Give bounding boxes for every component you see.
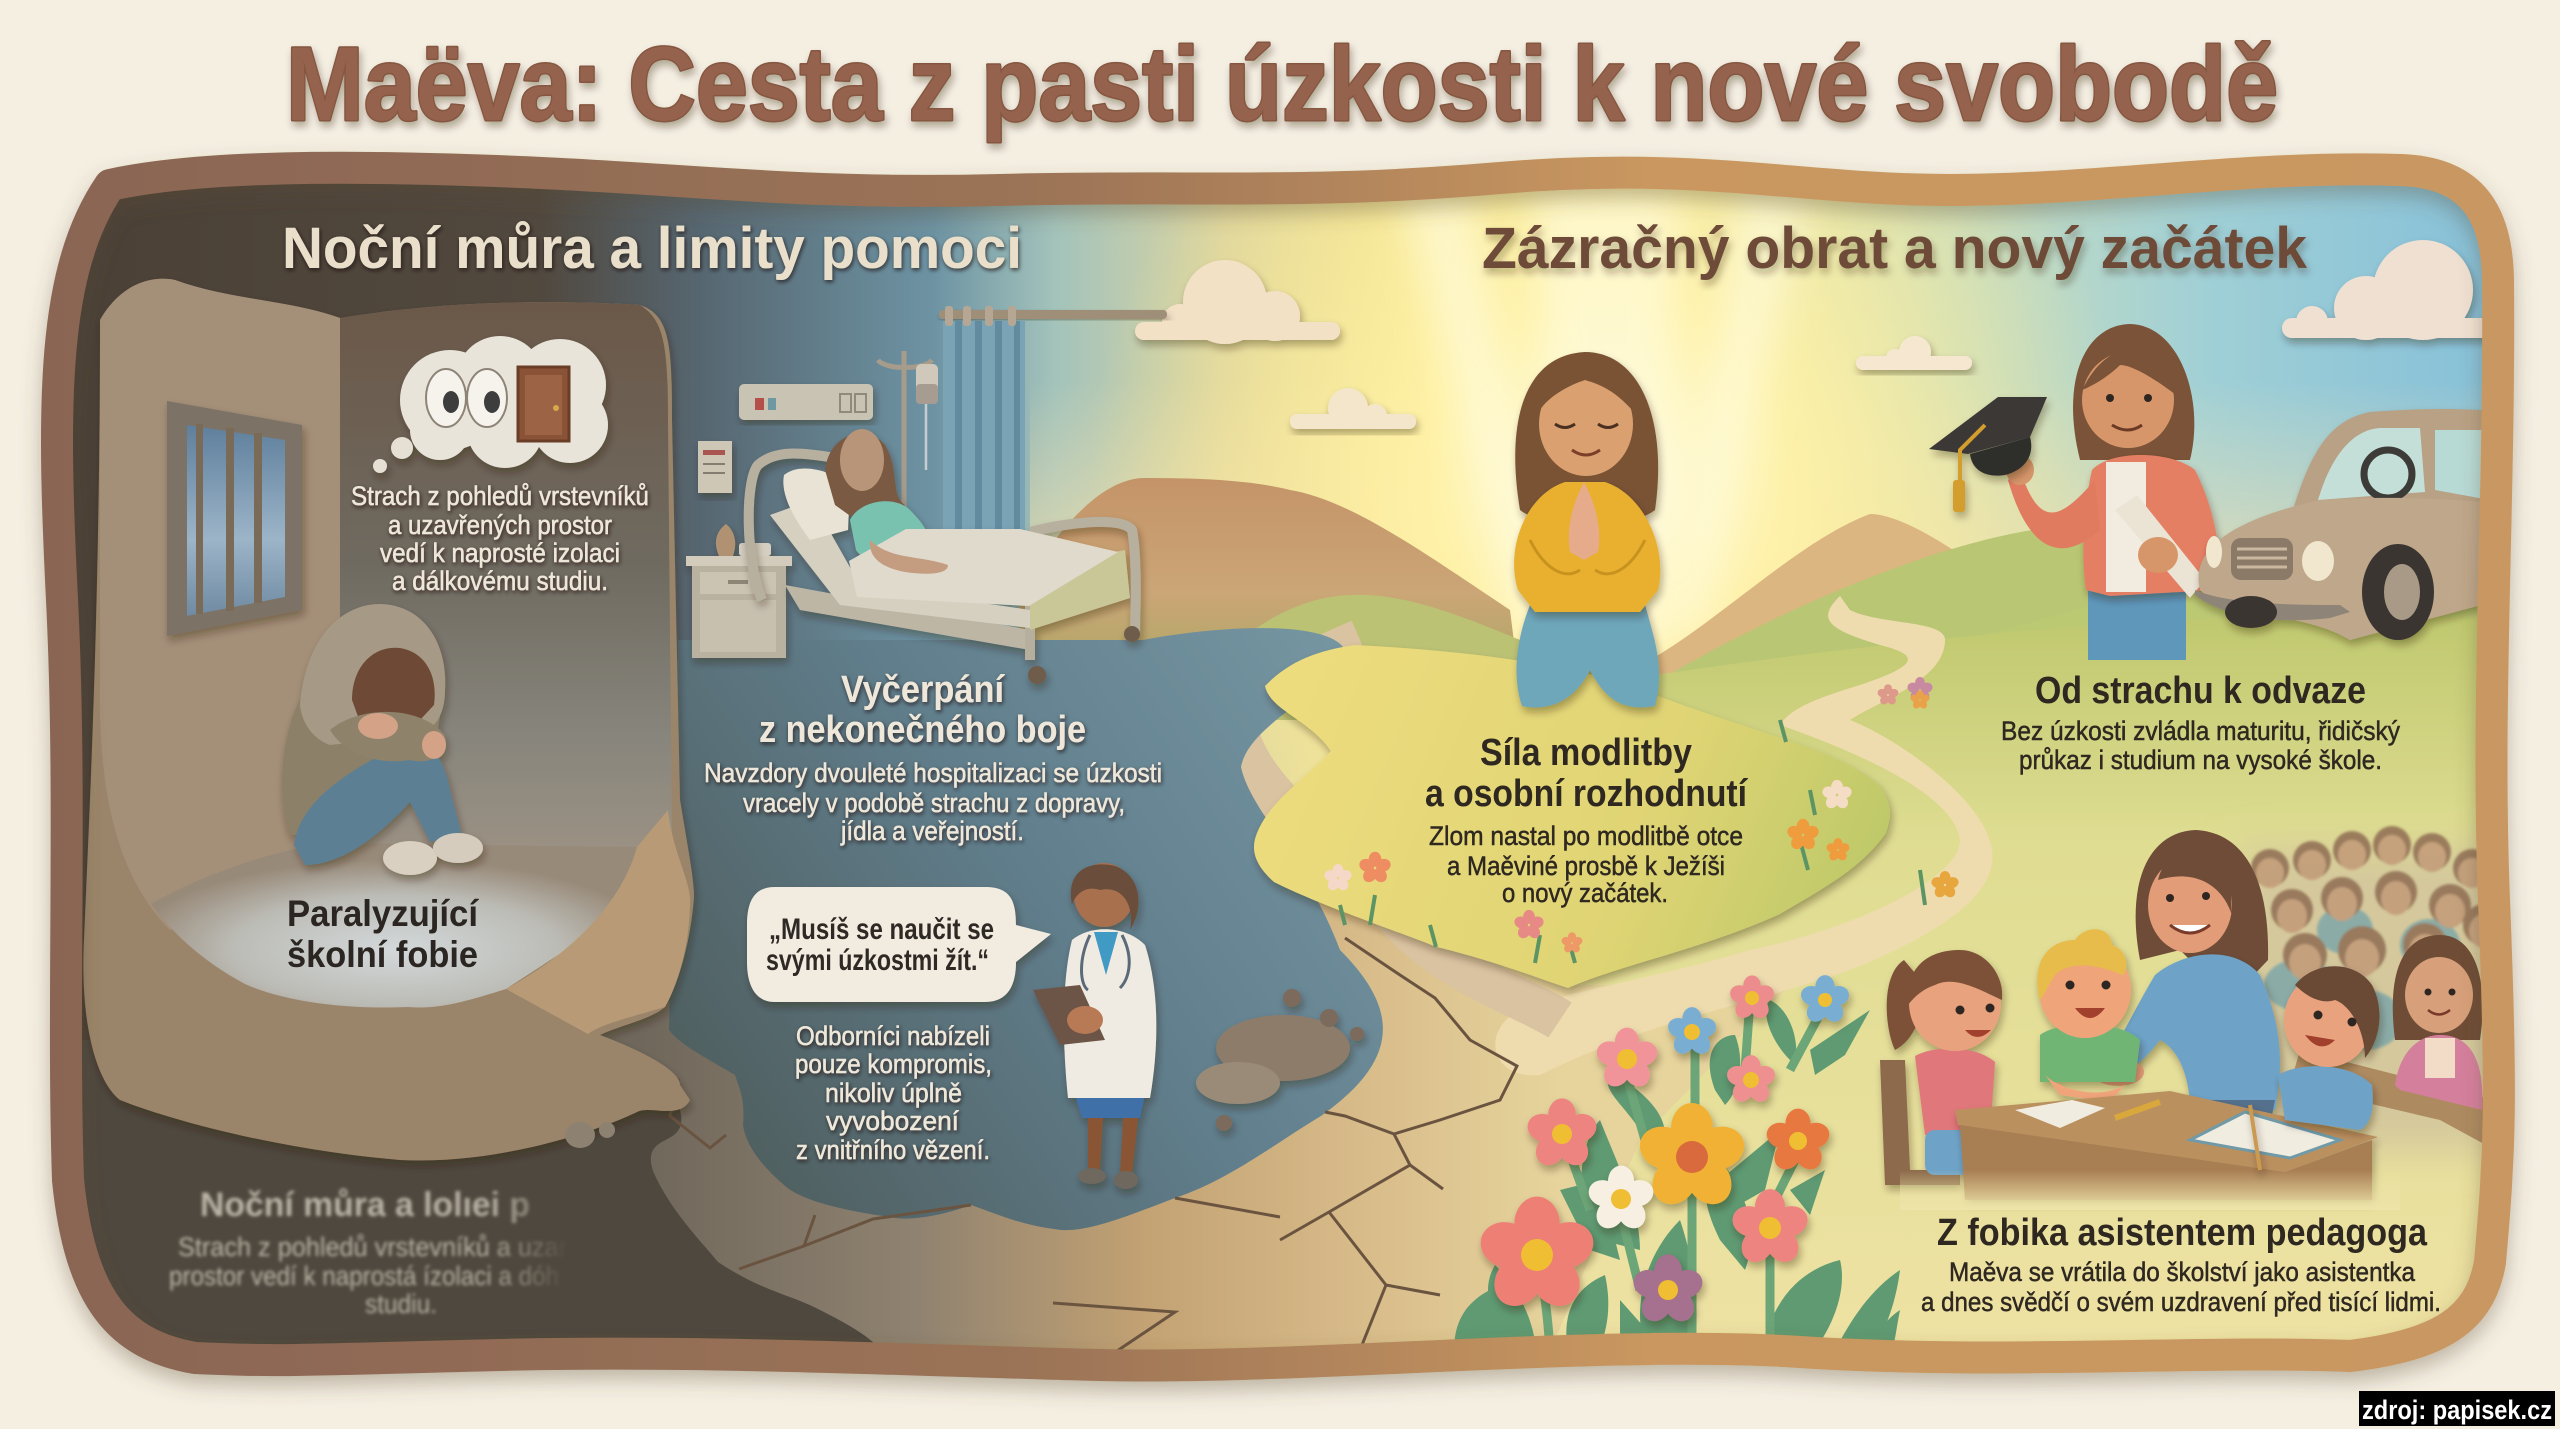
right wall <box>340 302 672 880</box>
heading: Vyčerpání z nekonečného boje <box>759 669 1086 751</box>
pupil: boy writing <box>2250 966 2379 1170</box>
classroom crowd <box>2251 826 2505 1050</box>
flower bunch <box>1412 975 1900 1365</box>
text: assistant <box>1921 1257 2441 1317</box>
speech bubble <box>747 887 1051 1002</box>
face <box>1539 372 1633 476</box>
IV pole and bag <box>878 351 938 510</box>
heading: Síla modlitby: Síla modlitby <box>1480 732 1692 774</box>
hair <box>1515 352 1658 525</box>
floor <box>151 843 640 1008</box>
curtain and rod <box>939 306 1167 541</box>
sky and wall backdrop <box>73 184 2482 1040</box>
hospital bed with patient <box>749 429 1140 684</box>
heading: left section: Noční můra a limity pomoci <box>282 216 1022 281</box>
dark lower-left ground <box>564 1109 874 1342</box>
text: experts: pouze kompromis, <box>795 1049 992 1079</box>
side path <box>1239 640 1560 1020</box>
jeans <box>1517 605 1659 708</box>
text: experts: Odborníci nabízeli <box>796 1021 990 1051</box>
text: hospitalisation <box>704 758 1162 846</box>
panel: illustrated landscape <box>73 184 2483 1350</box>
jeans <box>294 743 462 865</box>
under frame <box>785 585 1030 650</box>
text: thought caption <box>351 481 649 596</box>
teacher <box>2092 830 2280 1125</box>
heart meadow <box>1254 645 1890 988</box>
text: ghost caption <box>169 1186 567 1319</box>
barred window <box>167 401 302 636</box>
text: assistant: a dnes svědčí o svém uzdravení před tisící lidmi. <box>1921 1287 2441 1317</box>
right meadow <box>1558 635 2482 1342</box>
stone room <box>83 279 694 1160</box>
text: bubble quote: svými úzkostmi žít.“ <box>766 944 989 977</box>
cloud centre right <box>1856 336 1972 370</box>
title: Maëva: Cesta z pasti úzkosti k nové svobodě <box>286 26 2278 143</box>
text: Paralyzující školní fobie <box>287 893 480 975</box>
text: courage <box>2001 716 2400 775</box>
cloud right <box>2282 240 2507 340</box>
praying hands <box>1569 482 1599 560</box>
text: hospitalisation: jídla a veřejností. <box>840 816 1024 846</box>
fade under desk <box>1900 1170 2400 1210</box>
pupil: blond boy <box>2037 929 2140 1102</box>
text: bubble quote <box>766 913 994 977</box>
nightstand <box>686 524 792 658</box>
blossoms <box>1475 975 1852 1327</box>
text: Paralyzující školní fobie: školní fobie <box>287 934 478 975</box>
text: hospitalisation: Navzdory dvouleté hospitalizaci se úzkosti <box>704 758 1162 788</box>
heading: right section: Zázračný obrat a nový začátek <box>1482 216 2308 281</box>
text: thought caption: vedí k naprosté izolaci <box>380 538 620 568</box>
rocks <box>1196 989 1364 1131</box>
shoes <box>383 841 437 875</box>
arms <box>330 712 446 761</box>
poster <box>698 441 732 493</box>
text: prayer: Zlom nastal po modlitbě otce <box>1429 821 1743 851</box>
foot board <box>1030 522 1136 635</box>
left wall <box>100 279 340 930</box>
heading: Z fobika asistentem pedagoga: Z fobika asistentem pedagoga <box>1937 1212 2428 1254</box>
hooded figure <box>282 604 483 875</box>
text: courage: Bez úzkosti zvládla maturitu, řidičský <box>2001 716 2400 746</box>
small meadow flowers <box>1323 677 1960 963</box>
hospital gown <box>850 501 929 559</box>
pillow <box>783 468 850 540</box>
green hills <box>1256 530 2478 720</box>
wall monitor <box>739 384 873 420</box>
back desk <box>2290 1050 2495 1150</box>
leaves and stems <box>1412 1000 1900 1365</box>
heading: Síla modlitby <box>1425 732 1748 815</box>
hair <box>352 648 435 722</box>
face <box>840 429 884 491</box>
thought cloud <box>373 336 608 473</box>
text: assistant: Maěva se vrátila do školství jako asistentka <box>1949 1257 2416 1287</box>
jacket <box>282 680 445 835</box>
text: experts <box>795 1021 992 1165</box>
text: experts: vyvobození <box>826 1106 959 1136</box>
text: ghost caption: Strach z pohledů vrstevníků a uzar <box>178 1232 567 1262</box>
text: ghost caption: Noční můra a lolıei p <box>200 1186 530 1224</box>
sun glow <box>1160 188 2074 656</box>
text: Paralyzující školní fobie: Paralyzující <box>287 893 480 934</box>
text: thought caption: Strach z pohledů vrstevníků <box>351 481 649 511</box>
text: prayer: o nový začátek. <box>1502 878 1668 908</box>
doctor <box>1033 863 1156 1189</box>
classroom haze <box>2240 850 2520 1150</box>
classroom desk <box>1955 1091 2378 1200</box>
small pebbles <box>565 1122 615 1148</box>
mountains <box>1020 478 1952 674</box>
text: hospitalisation: vracely v podobě strachu z dopravy, <box>743 788 1125 818</box>
backrest <box>770 500 1030 628</box>
mattress end <box>1030 550 1130 630</box>
girl at back <box>2393 935 2483 1110</box>
sweater <box>1514 482 1660 612</box>
earth cracks <box>588 938 1517 1353</box>
pupil: girl with ponytail <box>1880 950 2002 1185</box>
river <box>669 628 1383 1230</box>
heading: Vyčerpání z nekonečného boje: Vyčerpání <box>841 669 1005 711</box>
heading: Vyčerpání z nekonečného boje: z nekonečného boje <box>759 709 1086 751</box>
text: courage: průkaz i studium na vysoké škole. <box>2019 745 2382 775</box>
text: experts: nikoliv úplně <box>825 1078 962 1108</box>
head rail <box>749 454 835 600</box>
cloud small <box>1290 388 1416 429</box>
text: prayer <box>1429 821 1743 908</box>
text: ghost caption: prostor vedí k naprostá ízolaci a dóh <box>169 1261 559 1291</box>
rock ledge <box>506 810 690 1034</box>
rock mass <box>83 279 694 1160</box>
text: bubble quote: „Musíš se naučit se <box>769 913 994 946</box>
winding road <box>1495 596 1993 1075</box>
text: experts: z vnitřního vězení. <box>796 1135 990 1165</box>
heading: Síla modlitby: a osobní rozhodnutí <box>1425 773 1748 815</box>
girl with graduation cap <box>2006 324 2219 660</box>
frame <box>57 168 2499 1366</box>
hospital wall items <box>698 306 1167 541</box>
heading: Od strachu k odvaze: Od strachu k odvaze <box>2035 670 2366 712</box>
hood <box>300 604 445 745</box>
horizon haze <box>1030 402 2482 549</box>
text: ghost caption: studiu. <box>365 1289 437 1319</box>
praying girl <box>1514 352 1660 708</box>
text: prayer: a Maěviné prosbě k Ježíši <box>1447 851 1725 881</box>
sheet <box>849 529 1118 606</box>
text: thought caption: a uzavřených prostor <box>388 510 612 540</box>
dry cracked earth <box>600 814 1784 1350</box>
graduation cap <box>1929 397 2047 512</box>
hair <box>825 434 905 530</box>
car <box>2195 409 2500 640</box>
text: thought caption: a dálkovému studiu. <box>392 566 608 596</box>
cloud left <box>1135 260 1340 344</box>
